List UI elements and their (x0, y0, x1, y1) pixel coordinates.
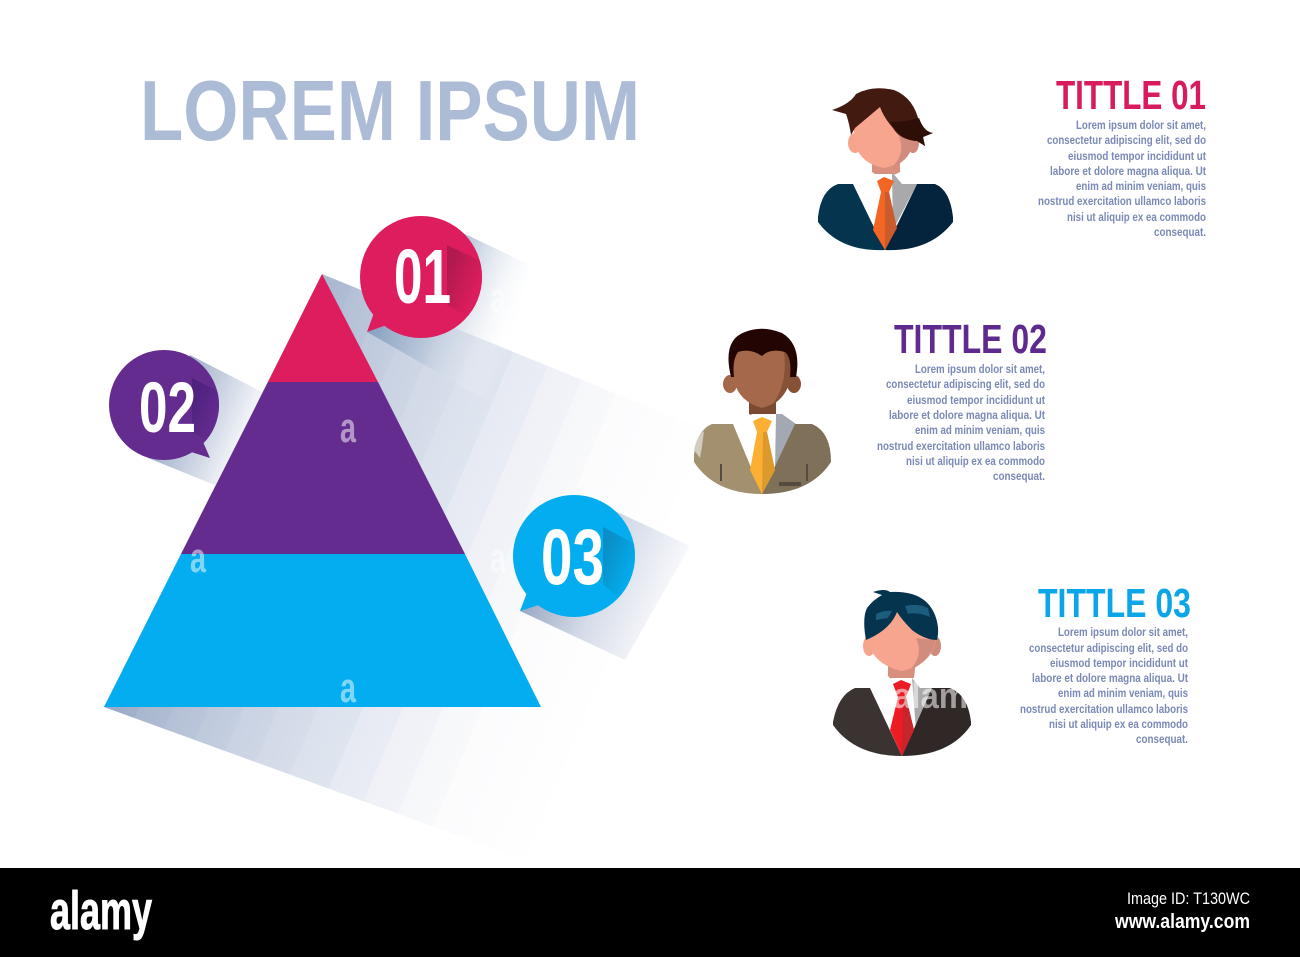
image id: Image ID: T130WC (1127, 889, 1250, 908)
footer bar (0, 868, 1300, 957)
body 2: nisi ut aliquip ex ea commodo (906, 454, 1045, 468)
face (868, 608, 936, 671)
bubble 03 (513, 495, 635, 617)
person 2 (694, 329, 831, 494)
watermark letters: a (490, 274, 506, 321)
body 2: Lorem ipsum dolor sit amet, (915, 362, 1045, 376)
text block 3 (1020, 580, 1191, 746)
hair (832, 88, 933, 146)
person 1 (818, 88, 953, 250)
ears (848, 133, 862, 153)
body 1: eiusmod tempor incididunt ut (1068, 149, 1206, 163)
neck (749, 398, 776, 418)
hair (864, 590, 938, 640)
watermark letters: a (490, 534, 506, 581)
text block 2 (877, 316, 1047, 483)
body 1: enim ad minim veniam, quis (1076, 179, 1206, 193)
tie (893, 680, 911, 697)
watermark letters (190, 274, 506, 711)
pyramid tier 2 (181, 382, 465, 554)
body 3: consequat. (1136, 732, 1188, 746)
body 1: consectetur adipiscing elit, sed do (1047, 133, 1206, 147)
body 3: eiusmod tempor incididunt ut (1050, 656, 1188, 670)
body 3: nisi ut aliquip ex ea commodo (1049, 717, 1188, 731)
shirt (733, 414, 795, 494)
shirt (870, 678, 932, 756)
pyramid long shadow (104, 274, 705, 860)
body 2 (877, 362, 1045, 483)
body 1: nostrud exercitation ullamco laboris (1038, 194, 1206, 208)
body 3: consectetur adipiscing elit, sed do (1029, 641, 1188, 655)
heading 2: TITTLE 02 (894, 316, 1047, 362)
pyramid tier 1 (268, 274, 378, 382)
watermark letters: a (340, 664, 356, 711)
shirt (853, 174, 917, 250)
person 3 watermark: alam (893, 675, 968, 716)
ears (723, 375, 737, 393)
heading 1: TITTLE 01 (1056, 72, 1206, 118)
face (733, 342, 791, 408)
bubble shadows (148, 222, 690, 660)
hair (728, 329, 797, 377)
watermark letters: a (340, 404, 356, 451)
jacket (818, 184, 885, 250)
body 3: enim ad minim veniam, quis (1058, 686, 1188, 700)
body 3: Lorem ipsum dolor sit amet, (1058, 625, 1188, 639)
body 2: consequat. (993, 469, 1045, 483)
body 1: nisi ut aliquip ex ea commodo (1067, 210, 1206, 224)
neck (888, 660, 916, 684)
jacket (694, 424, 762, 494)
bubble 03: 03 (541, 512, 604, 601)
body 3 (1020, 625, 1188, 746)
alamy logo: alamy (50, 881, 152, 941)
bubble 01 (360, 216, 495, 338)
heading 3: TITTLE 03 (1038, 580, 1191, 626)
body 1: labore et dolore magna aliqua. Ut (1050, 164, 1206, 178)
title: LOREM IPSUM (140, 64, 640, 159)
body 2: consectetur adipiscing elit, sed do (886, 377, 1045, 391)
jacket (833, 688, 902, 756)
body 1 (1038, 118, 1206, 239)
neck (872, 155, 900, 176)
pyramid chart (104, 274, 541, 707)
bubble 02 (109, 350, 219, 460)
body 1: Lorem ipsum dolor sit amet, (1076, 118, 1206, 132)
body 2: enim ad minim veniam, quis (915, 423, 1045, 437)
tie (877, 177, 894, 192)
jacket details (720, 464, 808, 486)
watermark letters: a (190, 534, 206, 581)
tie (753, 417, 772, 432)
face (854, 103, 914, 168)
bubble 01: 01 (394, 234, 451, 320)
bubble 02: 02 (139, 369, 196, 448)
website: www.alamy.com (1114, 911, 1250, 933)
text block 1 (1038, 72, 1206, 239)
body 2: labore et dolore magna aliqua. Ut (889, 408, 1045, 422)
person 3 (833, 590, 971, 756)
body 2: nostrud exercitation ullamco laboris (877, 439, 1045, 453)
pyramid tier 3 (104, 554, 541, 707)
ears (863, 636, 875, 656)
body 3: nostrud exercitation ullamco laboris (1020, 702, 1188, 716)
body 2: eiusmod tempor incididunt ut (907, 393, 1045, 407)
body 3: labore et dolore magna aliqua. Ut (1032, 671, 1188, 685)
body 1: consequat. (1154, 225, 1206, 239)
